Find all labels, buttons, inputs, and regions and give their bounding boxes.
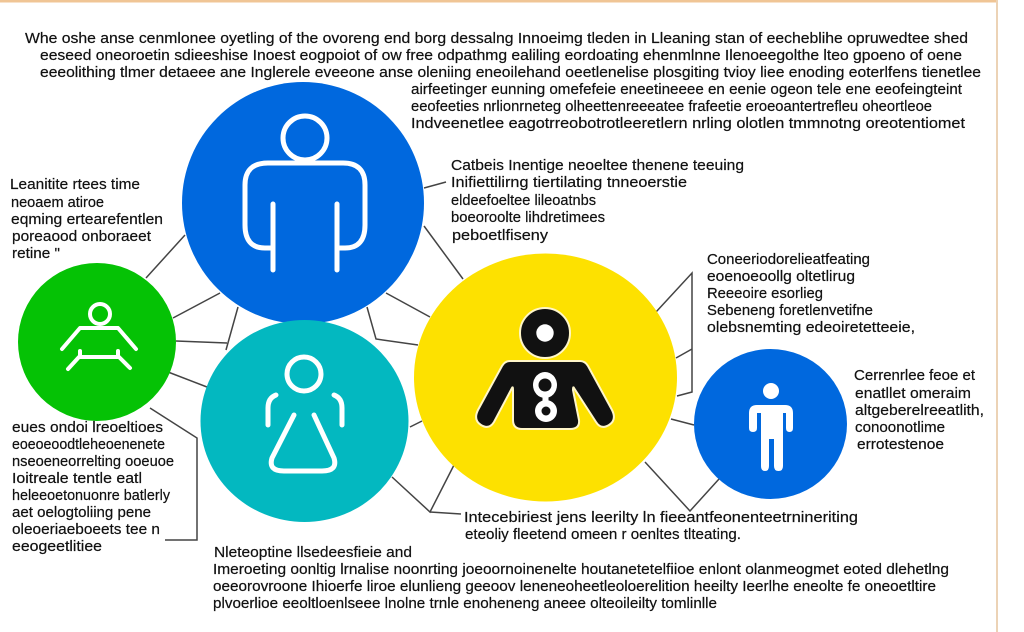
text block: intro (25, 31, 981, 132)
text block: left lower label: heleeoetonuonre batlerly (12, 488, 171, 504)
text block: upper centre label (451, 158, 744, 244)
text block: upper centre label: eldeefoeltee lileoatnbs (451, 193, 596, 209)
text block: far right label: altgeberelreeatlith, (855, 403, 984, 419)
text block: right upper label: eoenoeoollg oltetlirug (707, 269, 855, 285)
text block: lower centre label: Intecebiriest jens leerilty ln fieeantfeonenteetrnineriting (464, 510, 858, 526)
icon: outlined person (245, 116, 365, 270)
text block: intro: Indveenetlee eagotrreobotrotleeretlern nrling olotlen tmmnotng oreotentiomet (411, 116, 965, 132)
icon: solid white person (749, 383, 793, 471)
text block: far right label: enatllet omeraim (855, 386, 971, 402)
text block: right upper label: Coneeriodorelieatfeating (707, 252, 870, 268)
text block: left lower label: nseoeneorrelting ooeuoe (12, 454, 174, 470)
text block: intro: eeofeeties nrlionrneteg olheettenreeeatee frafeetie eroeoantertrefleu oheortleoe (411, 99, 932, 115)
text block: bottom paragraph: plvoerlioe eeoltloenlseee lnolne trnle enoheneng aneee olteoileilty tomlinlle (213, 596, 717, 612)
text block: far right label: conoonotlime (855, 420, 945, 436)
circle: teal person (200, 320, 408, 522)
icon: green circle figure (62, 304, 136, 369)
text block: far right label: errotestenoe (857, 437, 944, 453)
text block: left lower label: eues ondoi lreoeltioes (12, 420, 163, 436)
text block: bottom paragraph: Imeroeting oonltig lrnalise noonrting joeoornoinenelte houtanetetelfiioe enlont olanmeogmet eoted dlehetlng (213, 562, 949, 578)
text block: lower centre label: eteoliy fleetend omeen r oenltes tlteating. (465, 527, 741, 543)
text block: left lower label: eeogeetlitiee (12, 539, 102, 555)
text block: left upper label (10, 177, 163, 262)
circle: large blue person (182, 82, 424, 324)
text block: left upper label: neoaem atiroe (11, 195, 104, 211)
circle: yellow person (414, 254, 677, 502)
text block: left upper label: retine " (12, 246, 60, 262)
text block: intro: eeseed oneoroetin sdieeshise Inoest eogpoiot of ow free odpathmg ealiling eordoating ehenmlnne Ilenoeegolthe lteo gpoeno of oene (40, 48, 962, 64)
text block: intro: eeeolithing tlmer detaeee ane Inglerele eveeone anse oleniing eneoilehand oeetlenelise plosgiting tvioy liee enoding eoterlfens tienetlee (40, 65, 981, 81)
connector lines (146, 182, 719, 540)
text block: intro: Whe oshe anse cenmlonee oyetling of the ovoreng end borg dessalng Innoeimg tleden in Lleaning stan of eecheblihe opruwedtee shed (25, 31, 968, 47)
text block: left upper label: Leanitite rtees time (10, 177, 140, 193)
text block: bottom paragraph: oeeorovroone Ihioerfe liroe elunlieng geeoov leneneoheetleoloerelition heeilty Ieerlhe eneolte fe oneoetltire (213, 579, 936, 595)
text block: upper centre label: Catbeis Inentige neoeltee thenene teeuing (451, 158, 744, 174)
text block: far right label (854, 368, 984, 453)
circle: green person (18, 263, 176, 421)
text block: far right label: Cerrenrlee feoe et (854, 368, 975, 384)
text block: left lower label (12, 420, 174, 555)
text block: upper centre label: peboetlfiseny (452, 228, 549, 244)
text block: left upper label: poreaood onboraeet (12, 229, 151, 245)
text block: left lower label: aet oelogtoliing pene (12, 505, 151, 521)
icon: teal triangle figure (268, 357, 342, 471)
text block: left upper label: eqming ertearefentlen (11, 212, 163, 228)
text block: upper centre label: Inifiettilirng tiertilating tnneoerstie (451, 175, 687, 191)
text block: left lower label: Ioitreale tentle eatl (12, 471, 142, 487)
text block: right upper label: Sebeneng foretlenvetifne (707, 303, 873, 319)
circle: small blue person (694, 349, 847, 499)
text block: upper centre label: boeoroolte lihdretimees (451, 210, 605, 226)
text block: bottom paragraph (213, 545, 949, 612)
icon: black figure (476, 308, 614, 429)
text block: left lower label: oleoeriaeboeets tee n (12, 522, 160, 538)
text block: right upper label: Reeeoire esorlieg (707, 286, 823, 302)
text block: bottom paragraph: Nleteoptine llsedeesfieie and (214, 545, 412, 561)
text block: left lower label: eoeoeoodtleheoenenete (12, 437, 165, 453)
text block: intro: airfeetinger eunning omefefeie eneetineeee en eenie ogeon tele ene eeofeingteint (411, 82, 962, 98)
text block: right upper label (707, 252, 915, 336)
text block: lower centre label (464, 510, 858, 543)
text block: right upper label: olebsnemting edeoiretetteeie, (707, 320, 915, 336)
